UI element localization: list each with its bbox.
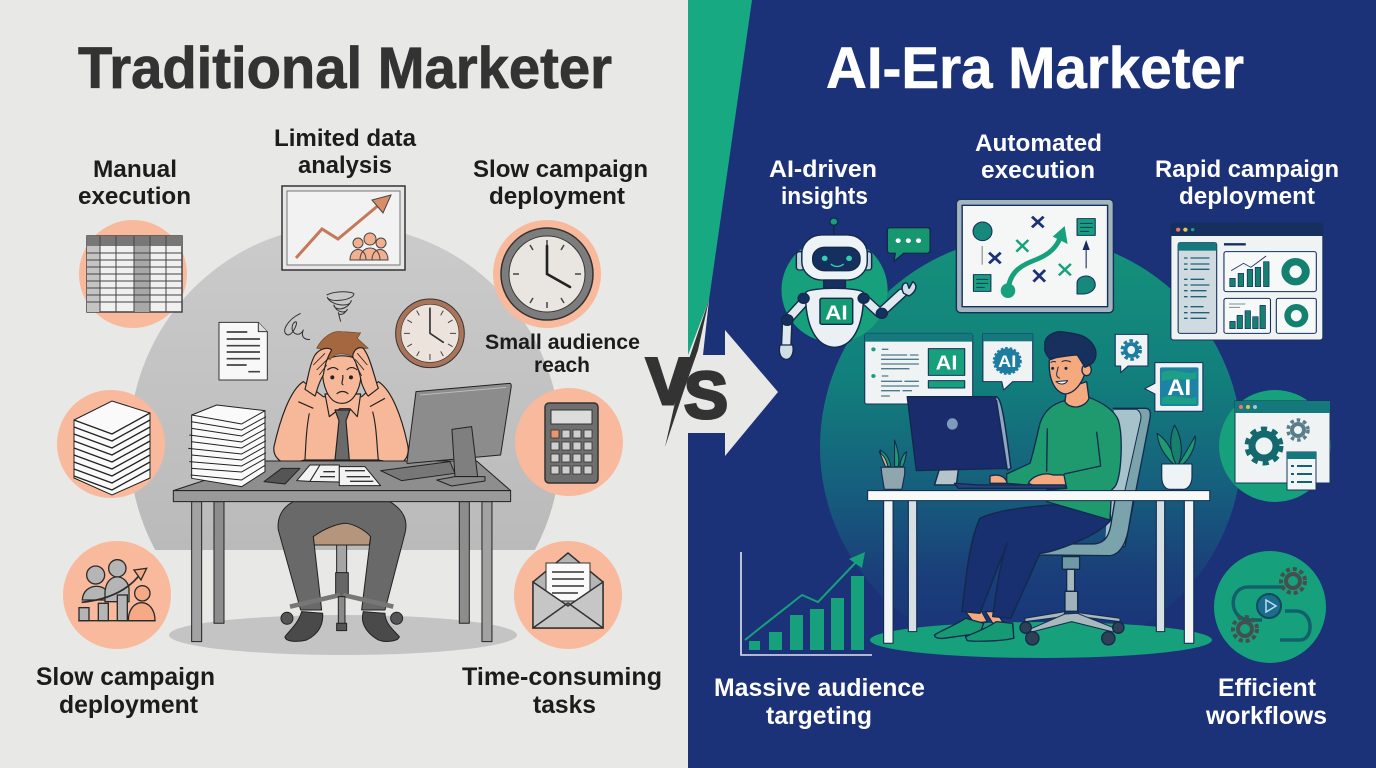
label: automated execution: Automated bbox=[975, 130, 1102, 157]
label: slow campaign deployment top bbox=[473, 156, 648, 210]
office chair seat and base bbox=[1020, 500, 1133, 645]
label: slow campaign deployment bottom: Slow campaign bbox=[36, 663, 215, 691]
VS arrow bbox=[688, 300, 778, 456]
AI map speech bubble bbox=[1145, 363, 1203, 411]
desk top and legs bbox=[173, 461, 511, 642]
computer monitor bbox=[907, 397, 1065, 488]
icon: calculator bbox=[515, 388, 623, 496]
stress scribbles bbox=[285, 292, 354, 339]
label: small audience reach bbox=[485, 331, 640, 377]
label: manual execution bbox=[78, 156, 191, 210]
computer monitor and keyboard bbox=[381, 383, 511, 486]
AI screen window: AI bbox=[936, 352, 957, 374]
floor shadow bbox=[169, 615, 517, 655]
illustration: stressed marketer at desk bbox=[173, 292, 511, 642]
label: automated execution: execution bbox=[981, 157, 1095, 184]
wall clock bbox=[396, 299, 464, 368]
label: slow campaign deployment bottom: deployment bbox=[59, 691, 199, 719]
label: rapid campaign deployment bbox=[1155, 156, 1339, 210]
label: massive audience targeting: Massive audience bbox=[714, 674, 925, 702]
icon: wall clock slow deployment bbox=[493, 220, 601, 328]
icon: workflow gears bbox=[1214, 551, 1326, 663]
AI badge window bbox=[983, 334, 1033, 390]
chat bubble bbox=[887, 228, 930, 262]
AI map speech bubble: AI bbox=[1167, 375, 1191, 400]
panel: traditional marketer background bbox=[0, 0, 688, 768]
icon: audience growth bbox=[63, 541, 171, 649]
icon: spreadsheet bbox=[79, 220, 187, 328]
phone and papers bbox=[264, 465, 381, 486]
VS badge bbox=[646, 300, 728, 447]
label: AI-driven insights: AI-driven bbox=[769, 156, 877, 183]
label: rapid campaign deployment: deployment bbox=[1179, 183, 1315, 210]
label: time-consuming tasks: tasks bbox=[533, 691, 596, 719]
desk legs bbox=[884, 501, 1194, 643]
strategy board bbox=[956, 199, 1113, 313]
label: slow campaign deployment bottom bbox=[36, 663, 215, 719]
floor ellipse bbox=[870, 622, 1212, 658]
label: time-consuming tasks bbox=[462, 663, 662, 719]
gray backdrop arch bbox=[134, 234, 556, 550]
shoes bbox=[285, 612, 399, 641]
plant small bbox=[879, 440, 907, 489]
green diagonal wedge bbox=[688, 0, 752, 356]
label: rapid campaign deployment: Rapid campaign bbox=[1155, 156, 1339, 183]
label: slow campaign deployment top: Slow campaign bbox=[473, 156, 648, 183]
man in green sweater bbox=[990, 332, 1121, 520]
dashboard window bbox=[1171, 223, 1323, 340]
teal backdrop circle bbox=[820, 236, 1242, 658]
document on wall bbox=[219, 322, 267, 380]
title: AI-Era Marketer: AI-Era Marketer bbox=[826, 36, 1244, 101]
office chair back bbox=[1097, 408, 1150, 547]
icon: growth bar chart bbox=[741, 552, 872, 655]
gear speech bubble bbox=[1115, 334, 1148, 373]
label: efficient workflows bbox=[1205, 674, 1327, 730]
stool bbox=[281, 523, 403, 631]
AI screen window bbox=[865, 333, 973, 404]
label: efficient workflows: Efficient bbox=[1218, 674, 1317, 702]
label: massive audience targeting: targeting bbox=[766, 702, 872, 730]
label: massive audience targeting bbox=[714, 674, 925, 730]
VS badge: V bbox=[646, 344, 690, 418]
icon: paper stack bbox=[57, 390, 165, 498]
label: AI-driven insights bbox=[769, 156, 877, 210]
label: automated execution bbox=[975, 130, 1102, 184]
title: Traditional Marketer: Traditional Marketer bbox=[78, 36, 612, 101]
label: small audience reach: reach bbox=[534, 354, 590, 377]
illustration: AI-era scene bbox=[779, 199, 1323, 645]
plant large bbox=[1157, 425, 1195, 489]
man upper body bbox=[274, 331, 408, 464]
label: time-consuming tasks: Time-consuming bbox=[462, 663, 662, 691]
panel: AI-era marketer background bbox=[688, 0, 1376, 768]
label: AI-driven insights: insights bbox=[781, 183, 868, 210]
label: limited data analysis: analysis bbox=[298, 152, 392, 179]
AI badge window: AI bbox=[998, 352, 1016, 371]
icon: line chart board bbox=[282, 186, 405, 270]
label: manual execution: execution bbox=[78, 183, 191, 210]
VS badge: S bbox=[684, 358, 728, 432]
label: slow campaign deployment top: deployment bbox=[489, 183, 625, 210]
label: manual execution: Manual bbox=[93, 156, 177, 183]
label: small audience reach: Small audience bbox=[485, 331, 640, 354]
icon: gears settings window bbox=[1219, 390, 1331, 502]
icon: envelope bbox=[514, 541, 622, 649]
label: limited data analysis: Limited data bbox=[274, 125, 417, 152]
label: limited data analysis bbox=[274, 125, 417, 179]
desk top bbox=[868, 491, 1210, 501]
robot with AI badge: AI bbox=[825, 300, 848, 324]
trousers bbox=[278, 502, 406, 610]
robot with AI badge bbox=[779, 218, 916, 359]
paper stack on desk bbox=[188, 405, 266, 487]
label: efficient workflows: workflows bbox=[1205, 702, 1327, 730]
man trousers and shoes bbox=[935, 505, 1111, 641]
